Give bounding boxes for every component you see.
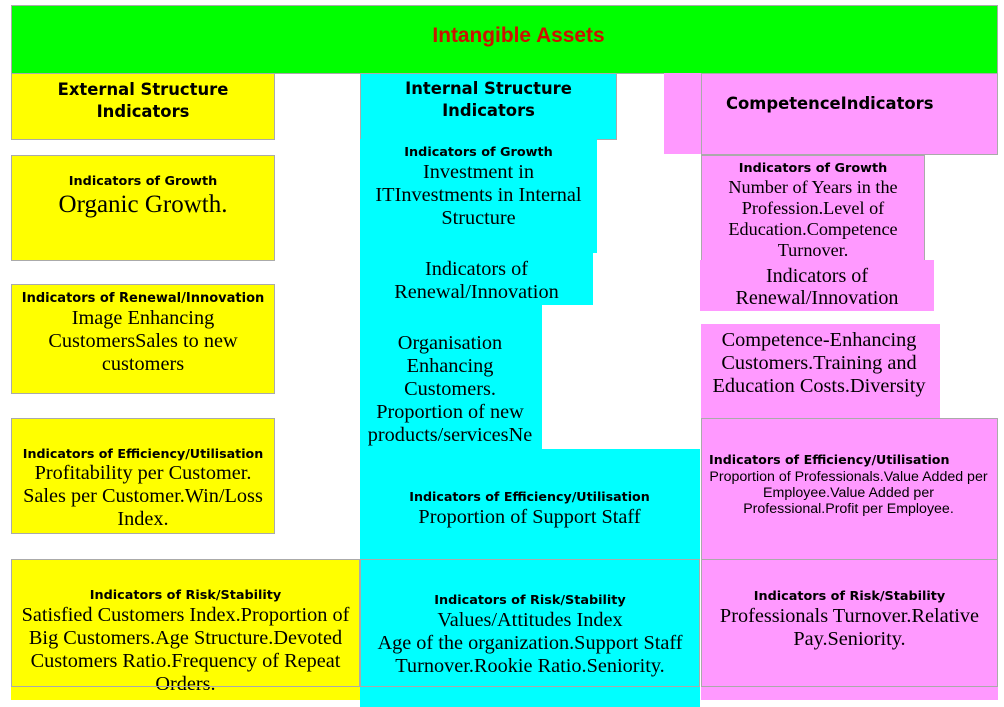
heading: external structure: Indicators: [97, 102, 189, 121]
internal enhancing text: Enhancing: [407, 355, 493, 377]
competence enhancing text: Competence-Enhancing: [722, 329, 916, 351]
internal renewal text: [394, 258, 559, 302]
external risk border: [11, 559, 360, 687]
internal enhancing text: [368, 332, 532, 446]
internal growth text: Structure: [441, 207, 516, 229]
competence growth text: [728, 161, 898, 260]
internal background: renewal: [360, 253, 593, 305]
panel: competence enhancing: [701, 324, 940, 419]
internal risk text: Age of the organization.Support Staff: [377, 632, 683, 654]
heading: competence: CompetenceIndicators: [726, 94, 934, 113]
panel: internal column: [360, 74, 700, 707]
external efficiency text: Indicators of Efficiency/Utilisation: [23, 446, 263, 461]
competence efficiency text: Employee.Value Added per: [763, 485, 934, 501]
external risk text: Indicators of Risk/Stability: [90, 588, 281, 603]
external renewal text: Indicators of Renewal/Innovation: [22, 291, 264, 306]
external renewal text: customers: [102, 353, 184, 375]
internal enhancing text: Organisation: [398, 332, 502, 354]
external efficiency text: Profitability per Customer.: [35, 462, 251, 484]
panel: external growth: [11, 155, 275, 261]
competence growth text: Indicators of Growth: [739, 161, 887, 176]
heading: internal structure: Indicators: [442, 101, 535, 120]
internal growth text: Indicators of Growth: [404, 145, 553, 160]
external efficiency text: [23, 446, 263, 530]
competence risk text: [720, 589, 979, 650]
competence risk text: Pay.Seniority.: [793, 628, 906, 650]
external risk text: [22, 588, 350, 695]
competence efficiency text: [709, 452, 988, 517]
competence efficiency text: Proportion of Professionals.Value Added per: [709, 469, 988, 485]
competence risk border: [701, 559, 998, 687]
external growth text: Organic Growth.: [59, 191, 227, 218]
competence risk text: Indicators of Risk/Stability: [754, 589, 945, 604]
heading: external structure: External Structure: [58, 80, 228, 99]
external renewal text: CustomersSales to new: [48, 330, 238, 352]
panel: competence tab: [664, 73, 702, 154]
external renewal text: Image Enhancing: [72, 307, 214, 329]
internal enhancing text: Proportion of new: [376, 401, 524, 423]
external growth text: Indicators of Growth: [69, 174, 217, 189]
title banner: [11, 5, 998, 74]
competence renewal text: [736, 265, 898, 309]
panel: competence risk: [701, 559, 998, 700]
external risk text: Big Customers.Age Structure.Devoted: [29, 627, 342, 649]
internal growth text: Investment in: [423, 161, 534, 183]
internal efficiency text: [409, 489, 650, 528]
external risk text: Customers Ratio.Frequency of Repeat: [31, 650, 340, 672]
internal risk text: Turnover.Rookie Ratio.Seniority.: [395, 655, 665, 677]
internal risk text: Values/Attitudes Index: [437, 609, 623, 631]
competence growth text: Number of Years in the: [728, 177, 898, 197]
panel: external efficiency: [11, 418, 275, 534]
panel: competence growth: [701, 155, 925, 261]
panel: competence renewal: [700, 260, 934, 311]
panel: competence efficiency: [701, 418, 998, 560]
competence efficiency text: Professional.Profit per Employee.: [743, 501, 954, 517]
internal risk border: [360, 559, 700, 687]
external risk text: Orders.: [155, 673, 216, 695]
internal renewal text: Renewal/Innovation: [394, 280, 559, 302]
internal growth text: ITInvestments in Internal: [375, 184, 582, 206]
heading: external structure: [58, 80, 228, 121]
internal enhancing text: products/servicesNe: [368, 424, 532, 446]
competence renewal text: Indicators of: [766, 265, 868, 287]
internal background: header: [360, 74, 617, 140]
competence growth text: Profession.Level of: [742, 198, 884, 218]
competence growth text: Turnover.: [778, 240, 848, 260]
internal efficiency text: Indicators of Efficiency/Utilisation: [409, 489, 650, 504]
internal background: efficiency and risk: [360, 449, 700, 707]
heading: internal structure: [405, 79, 572, 120]
internal efficiency text: Proportion of Support Staff: [418, 506, 641, 528]
panel: external renewal: [11, 284, 275, 394]
competence enhancing text: Customers.Training and: [721, 352, 917, 374]
external efficiency text: Sales per Customer.Win/Loss: [23, 485, 263, 507]
internal risk text: [377, 593, 683, 677]
internal background: enhancing: [360, 305, 542, 449]
panel: external header: [11, 73, 275, 140]
competence growth text: Education.Competence: [728, 219, 898, 239]
internal background: growth: [360, 139, 597, 253]
title: Intangible Assets: [432, 24, 605, 47]
internal risk text: Indicators of Risk/Stability: [434, 593, 626, 608]
heading: internal structure: Internal Structure: [405, 79, 572, 98]
external renewal text: [22, 291, 264, 375]
external growth text: [59, 174, 227, 218]
internal enhancing text: Customers.: [404, 378, 496, 400]
competence enhancing text: Education Costs.Diversity: [713, 375, 925, 397]
panel: competence header: [701, 73, 998, 155]
panel: external risk: [11, 559, 360, 700]
external efficiency text: Index.: [117, 508, 169, 530]
internal growth text: [375, 145, 582, 229]
competence risk text: Professionals Turnover.Relative: [720, 605, 979, 627]
competence enhancing text: [713, 329, 926, 397]
internal renewal text: Indicators of: [425, 258, 528, 280]
competence renewal text: Renewal/Innovation: [736, 287, 898, 309]
competence efficiency text: Indicators of Efficiency/Utilisation: [709, 452, 949, 467]
external risk text: Satisfied Customers Index.Proportion of: [22, 604, 349, 626]
